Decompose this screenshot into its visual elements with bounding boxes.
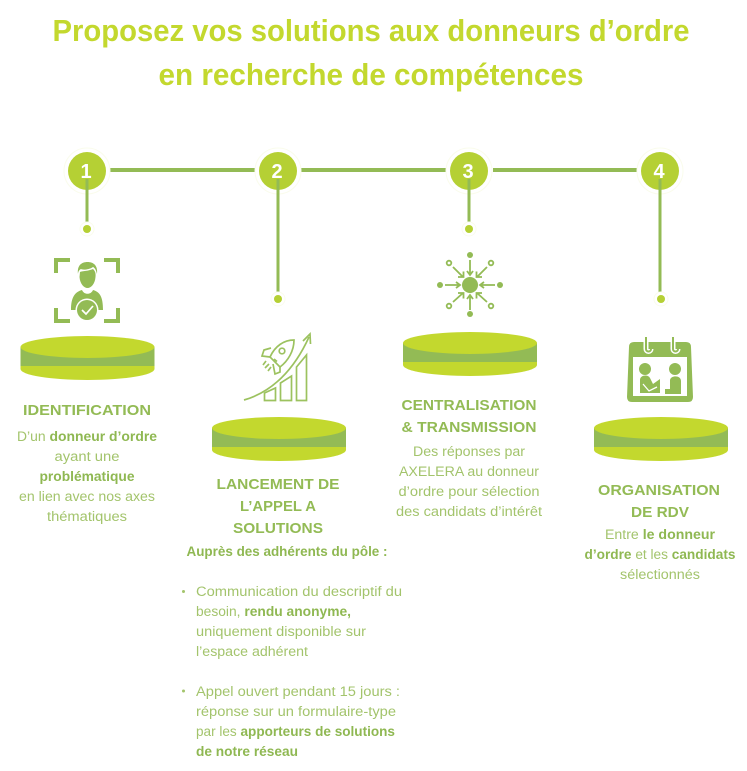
text block: identification: thématiques — [47, 509, 127, 524]
text block: organisation: Entre le donneur — [605, 527, 716, 542]
text block: organisation: sélectionnés — [620, 567, 700, 582]
text block: identification: en lien avec nos axes — [19, 489, 155, 504]
text block: organisation: ORGANISATION — [598, 482, 720, 499]
step marker 1: 1 — [80, 161, 92, 183]
text block: organisation: DE RDV — [631, 504, 689, 521]
icon: person with check in frame — [56, 260, 118, 322]
bullet list: de notre réseau — [196, 744, 298, 759]
text block: identification: ayant une — [54, 449, 120, 464]
text block: centralisation: AXELERA au donneur — [399, 464, 540, 479]
step marker 2 — [255, 148, 301, 306]
text block: lancement: L’APPEL A — [240, 498, 316, 515]
text block: identification: D’un donneur d’ordre — [17, 429, 158, 444]
text block: centralisation: d’ordre pour sélection — [398, 484, 540, 499]
text block: centralisation: des candidats d’intérêt — [396, 504, 542, 519]
bullet list: uniquement disponible sur — [196, 624, 367, 639]
platform 1 — [20, 336, 154, 380]
text block: centralisation: Des réponses par — [413, 444, 526, 459]
bullet list: besoin, rendu anonyme, — [196, 604, 351, 619]
timeline connector — [110, 168, 639, 172]
text block: centralisation — [396, 397, 542, 519]
platform 2 — [212, 417, 346, 461]
platform 3 — [403, 332, 537, 376]
step marker 4 — [637, 148, 683, 306]
step marker 2: 2 — [271, 161, 283, 183]
icon: rocket and growth chart — [244, 334, 310, 400]
text block: identification: problématique — [40, 469, 135, 484]
title: en recherche de compétences — [158, 57, 584, 92]
text block: lancement: LANCEMENT DE — [216, 476, 340, 493]
step marker 4: 4 — [653, 161, 665, 183]
icon: arrows converging on a centre — [437, 252, 503, 317]
bullet list — [182, 584, 402, 759]
bullet list: Appel ouvert pendant 15 jours : — [196, 684, 400, 699]
text block: identification: IDENTIFICATION — [23, 402, 151, 419]
bullet list: réponse sur un formulaire-type — [196, 704, 396, 719]
text block: organisation — [584, 482, 736, 582]
text block: organisation: d’ordre et les candidats — [584, 547, 736, 562]
title — [52, 13, 690, 92]
bullet list: l’espace adhérent — [196, 644, 308, 659]
text block: lancement: Auprès des adhérents du pôle : — [186, 544, 388, 559]
text block: identification — [17, 402, 158, 524]
title: Proposez vos solutions aux donneurs d’ordre — [52, 13, 690, 48]
icon: calendar with two people — [627, 336, 693, 402]
step marker 3 — [446, 148, 492, 236]
bullet list: Communication du descriptif du — [196, 584, 402, 599]
platform 4 — [594, 417, 728, 461]
bullet list: par les apporteurs de solutions — [196, 724, 395, 739]
step marker 1 — [64, 148, 110, 236]
text block: lancement: SOLUTIONS — [233, 520, 323, 537]
step marker 3: 3 — [462, 161, 474, 183]
text block: centralisation: CENTRALISATION — [402, 397, 536, 414]
text block: lancement — [182, 476, 402, 759]
text block: centralisation: & TRANSMISSION — [402, 419, 536, 436]
